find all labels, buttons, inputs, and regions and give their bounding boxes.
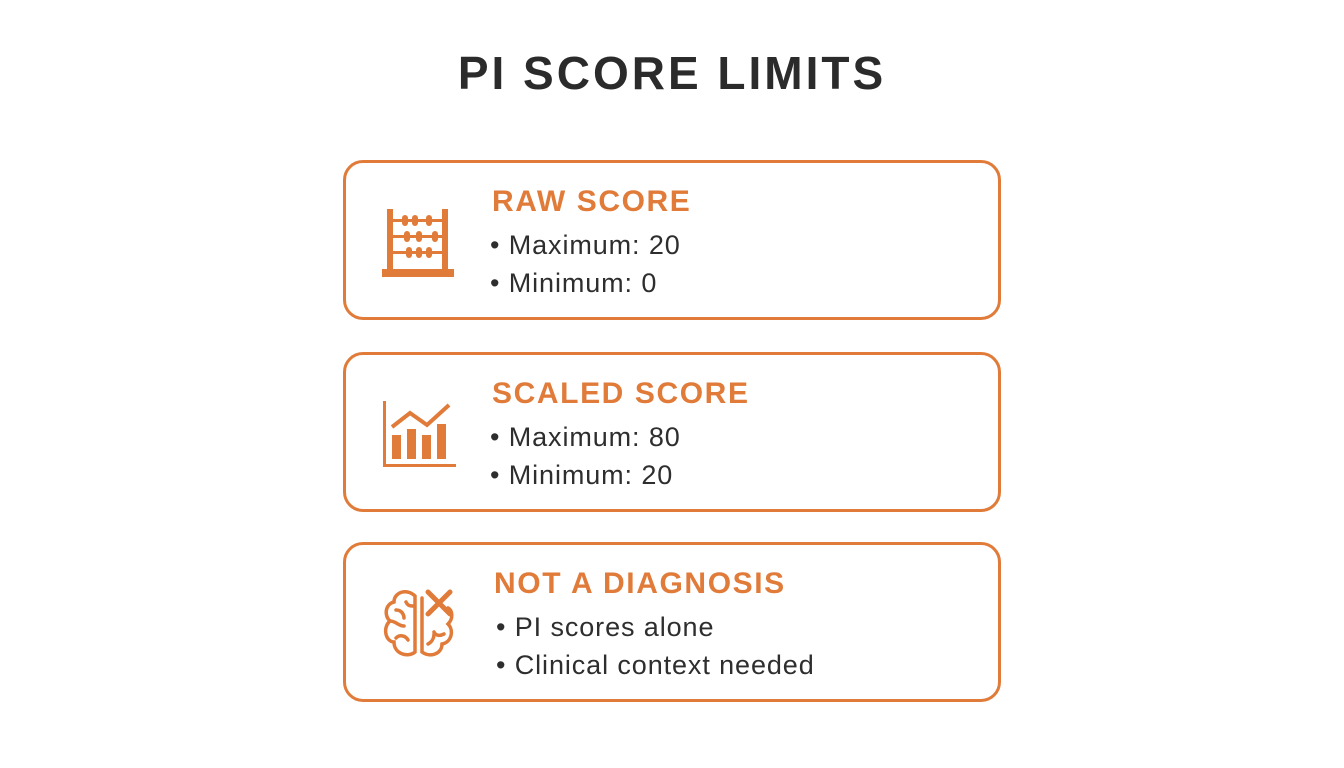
- bullets: • Maximum: 80: [490, 422, 681, 452]
- panel: scaled score: [343, 352, 1001, 512]
- bullets: • Minimum: 0: [490, 268, 657, 298]
- panel: not a diagnosis: [343, 542, 1001, 702]
- bullets: [490, 230, 681, 298]
- bullets: • Maximum: 20: [490, 230, 681, 260]
- heading: SCALED SCORE: [492, 377, 750, 410]
- heading: NOT A DIAGNOSIS: [494, 567, 786, 600]
- icon: brain with x: [384, 590, 454, 657]
- icon: chart: [383, 401, 456, 467]
- bullets: • Clinical context needed: [496, 650, 815, 680]
- panel: raw score: [343, 160, 1001, 320]
- title: PI SCORE LIMITS: [458, 47, 886, 99]
- bullets: [490, 422, 681, 490]
- heading: RAW SCORE: [492, 185, 691, 218]
- bullets: [496, 612, 815, 680]
- icon: abacus: [382, 209, 454, 277]
- bullets: • PI scores alone: [496, 612, 714, 642]
- bullets: • Minimum: 20: [490, 460, 673, 490]
